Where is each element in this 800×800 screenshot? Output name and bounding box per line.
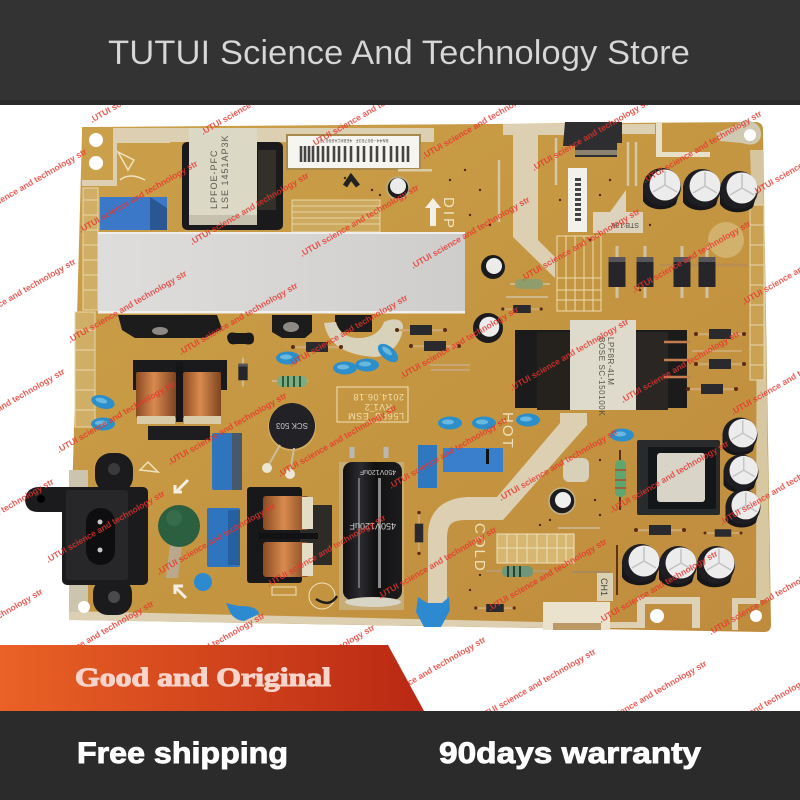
varistor: green bbox=[158, 505, 200, 578]
orange banner bbox=[0, 645, 424, 711]
watermark text: .UTUI science and technology str bbox=[497, 426, 620, 503]
watermark text: .UTUI science and technology str bbox=[486, 536, 609, 613]
heat sink bbox=[98, 232, 465, 314]
watermark text: .UTUI science and technology str bbox=[608, 438, 731, 515]
barcode label: BN44-00703F 4EBKCA00070 bbox=[319, 137, 389, 143]
left silkscreen table bbox=[75, 188, 98, 427]
banner text: Good and Original bbox=[75, 663, 331, 692]
connector: top bbox=[563, 122, 622, 157]
arrows around varistor bbox=[174, 480, 188, 598]
common mode choke: lower bbox=[247, 487, 332, 583]
watermark text: .UTUI science and technology str bbox=[519, 206, 642, 283]
watermark text: .UTUI science and technology str bbox=[597, 548, 720, 625]
icon: samsung mark and triangles bbox=[118, 152, 158, 472]
resistor: bottom striped bbox=[486, 566, 548, 577]
store title: TUTUI Science And Technology Store bbox=[108, 34, 690, 72]
power supply circuit board photo bbox=[25, 120, 771, 632]
capacitor: blue box lower bbox=[207, 508, 240, 567]
heat sink clamps bbox=[118, 315, 372, 338]
CH1 label: CH1 bbox=[599, 578, 609, 596]
watermark text: .UTUI science and technology str bbox=[88, 48, 211, 125]
watermark text: .UTUI science and technology str bbox=[155, 500, 278, 577]
circuit board vias bbox=[344, 169, 651, 591]
diodes: right of transformer bbox=[686, 329, 746, 394]
transformer label: LSE 1451AP3K bbox=[220, 134, 230, 209]
mounting holes bbox=[78, 133, 762, 623]
Y capacitors: bottom bbox=[194, 573, 450, 627]
watermark text: .UTUI science and technology str bbox=[365, 634, 488, 711]
component spec table bbox=[292, 200, 380, 232]
tape wrapped coil bbox=[324, 319, 403, 357]
small capacitors and resistor left of transformer bbox=[473, 255, 550, 343]
watermark text: .UTUI science and technology str bbox=[166, 390, 289, 467]
watermark text: .UTUI science and technology str bbox=[376, 524, 499, 601]
silkscreen table right of strip bbox=[557, 236, 601, 311]
watermark text: .UTUI science and technology str bbox=[619, 328, 742, 405]
watermark text: .UTUI science and technology str bbox=[276, 402, 399, 479]
transformer: PFC bbox=[182, 128, 283, 230]
thermistor bbox=[262, 403, 316, 479]
watermark text: .UTUI science and technology str bbox=[254, 622, 377, 699]
Y capacitors: mid row bbox=[438, 414, 540, 430]
pale silkscreen strips bbox=[69, 122, 770, 630]
power socket bbox=[25, 453, 148, 615]
transformer label: LPF8R-4LM bbox=[606, 337, 615, 386]
connector: bottom white bbox=[543, 602, 610, 630]
electrolytic capacitor: main: 450V120uF bbox=[349, 521, 396, 531]
COLD marking: COLD bbox=[471, 523, 488, 573]
transformer label: BOSE SC-150100K bbox=[597, 337, 606, 416]
free shipping text: Free shipping bbox=[77, 737, 288, 770]
watermark text: .UTUI science and technology str bbox=[530, 96, 653, 173]
version label box bbox=[337, 387, 408, 422]
silkscreen semicircle bbox=[708, 222, 744, 258]
diodes: vertical row bbox=[608, 246, 716, 298]
watermark text: .UTUI science and technology str bbox=[199, 60, 322, 137]
watermark text: .UTUI science and technology str bbox=[398, 304, 521, 381]
capacitor: blue box upper bbox=[212, 433, 242, 490]
watermark text: .UTUI science and technology str bbox=[55, 378, 178, 455]
watermark text: .UTUI science and technology str bbox=[409, 194, 532, 271]
optocoupler blue boxes bbox=[418, 445, 503, 488]
transformer label: LPFOE-PFC bbox=[209, 149, 219, 209]
version label box: L56FB_ESM bbox=[348, 411, 404, 421]
capacitor: blue box top left bbox=[100, 197, 167, 230]
ground tab bbox=[716, 120, 761, 144]
version label box: RV1.2 bbox=[364, 402, 392, 412]
transformer: small standby bbox=[637, 440, 720, 515]
barcode label bbox=[286, 134, 421, 170]
small jumpers and capacitor top bbox=[345, 169, 432, 199]
watermark text: .UTUI science and technology str bbox=[188, 170, 311, 247]
Y capacitors: left bbox=[90, 393, 116, 430]
watermark text: .UTUI science and technology str bbox=[586, 658, 709, 735]
electrolytic capacitor: main: 450V120uF bbox=[360, 468, 396, 475]
watermark text: .UTUI science and technology str bbox=[287, 292, 410, 369]
warranty text: 90days warranty bbox=[439, 737, 701, 770]
watermark text: .UTUI science and technology str bbox=[265, 512, 388, 589]
capacitors: bottom row bbox=[622, 544, 735, 587]
watermark text: .UTUI science and technology str bbox=[44, 488, 167, 565]
watermark text: .UTUI science and technology str bbox=[420, 84, 543, 161]
watermark text: .UTUI science and technology str bbox=[33, 598, 156, 675]
electrolytic capacitor: main bbox=[339, 447, 404, 610]
CH1 label bbox=[597, 573, 613, 601]
watermark text: .UTUI science and technology str bbox=[77, 158, 200, 235]
white vertical label bbox=[568, 168, 587, 232]
watermark text: .UTUI science and technology str bbox=[177, 280, 300, 357]
resistor: green striped bbox=[277, 376, 307, 387]
watermark text: .UTUI science and technology str bbox=[508, 316, 631, 393]
capacitors: top right bbox=[643, 168, 758, 212]
bottom diode and jumper bbox=[474, 545, 618, 612]
jumper wires top bbox=[499, 138, 748, 265]
watermark text: .UTUI science and technology str bbox=[630, 218, 753, 295]
capacitors: right column bbox=[723, 418, 760, 528]
common mode choke: upper bbox=[133, 360, 227, 440]
watermark text: .UTUI science and technology str bbox=[641, 108, 764, 185]
DIP marking: DIP bbox=[440, 197, 457, 231]
watermark text: .UTUI science and technology str bbox=[475, 646, 598, 723]
STB label: STB:13V bbox=[611, 221, 639, 228]
watermark text: .UTUI science and technology str bbox=[309, 72, 432, 149]
thermistor: SCK 503 bbox=[275, 421, 308, 430]
version label box: 2014.06.18 bbox=[353, 392, 404, 402]
header bar bbox=[0, 0, 800, 105]
footer bar bbox=[0, 711, 800, 800]
watermark text: .UTUI science and technology str bbox=[144, 610, 267, 687]
HOT marking: HOT bbox=[499, 412, 516, 450]
small standby parts bbox=[549, 428, 742, 537]
board substrate bbox=[69, 122, 771, 632]
silkscreen bridge and pads bbox=[272, 583, 337, 609]
small parts below heat sink bbox=[227, 325, 470, 386]
watermark text: .UTUI science and technology str bbox=[298, 182, 421, 259]
silkscreen grid bottom bbox=[497, 534, 574, 563]
watermark text: .UTUI science and technology str bbox=[66, 268, 189, 345]
transformer: main bbox=[515, 320, 690, 416]
arrow: DIP direction bbox=[425, 198, 441, 226]
STB label bbox=[593, 190, 643, 233]
right silkscreen table bbox=[750, 205, 764, 380]
watermark text: .UTUI science and technology str bbox=[387, 414, 510, 491]
vertical diode bbox=[415, 511, 423, 555]
